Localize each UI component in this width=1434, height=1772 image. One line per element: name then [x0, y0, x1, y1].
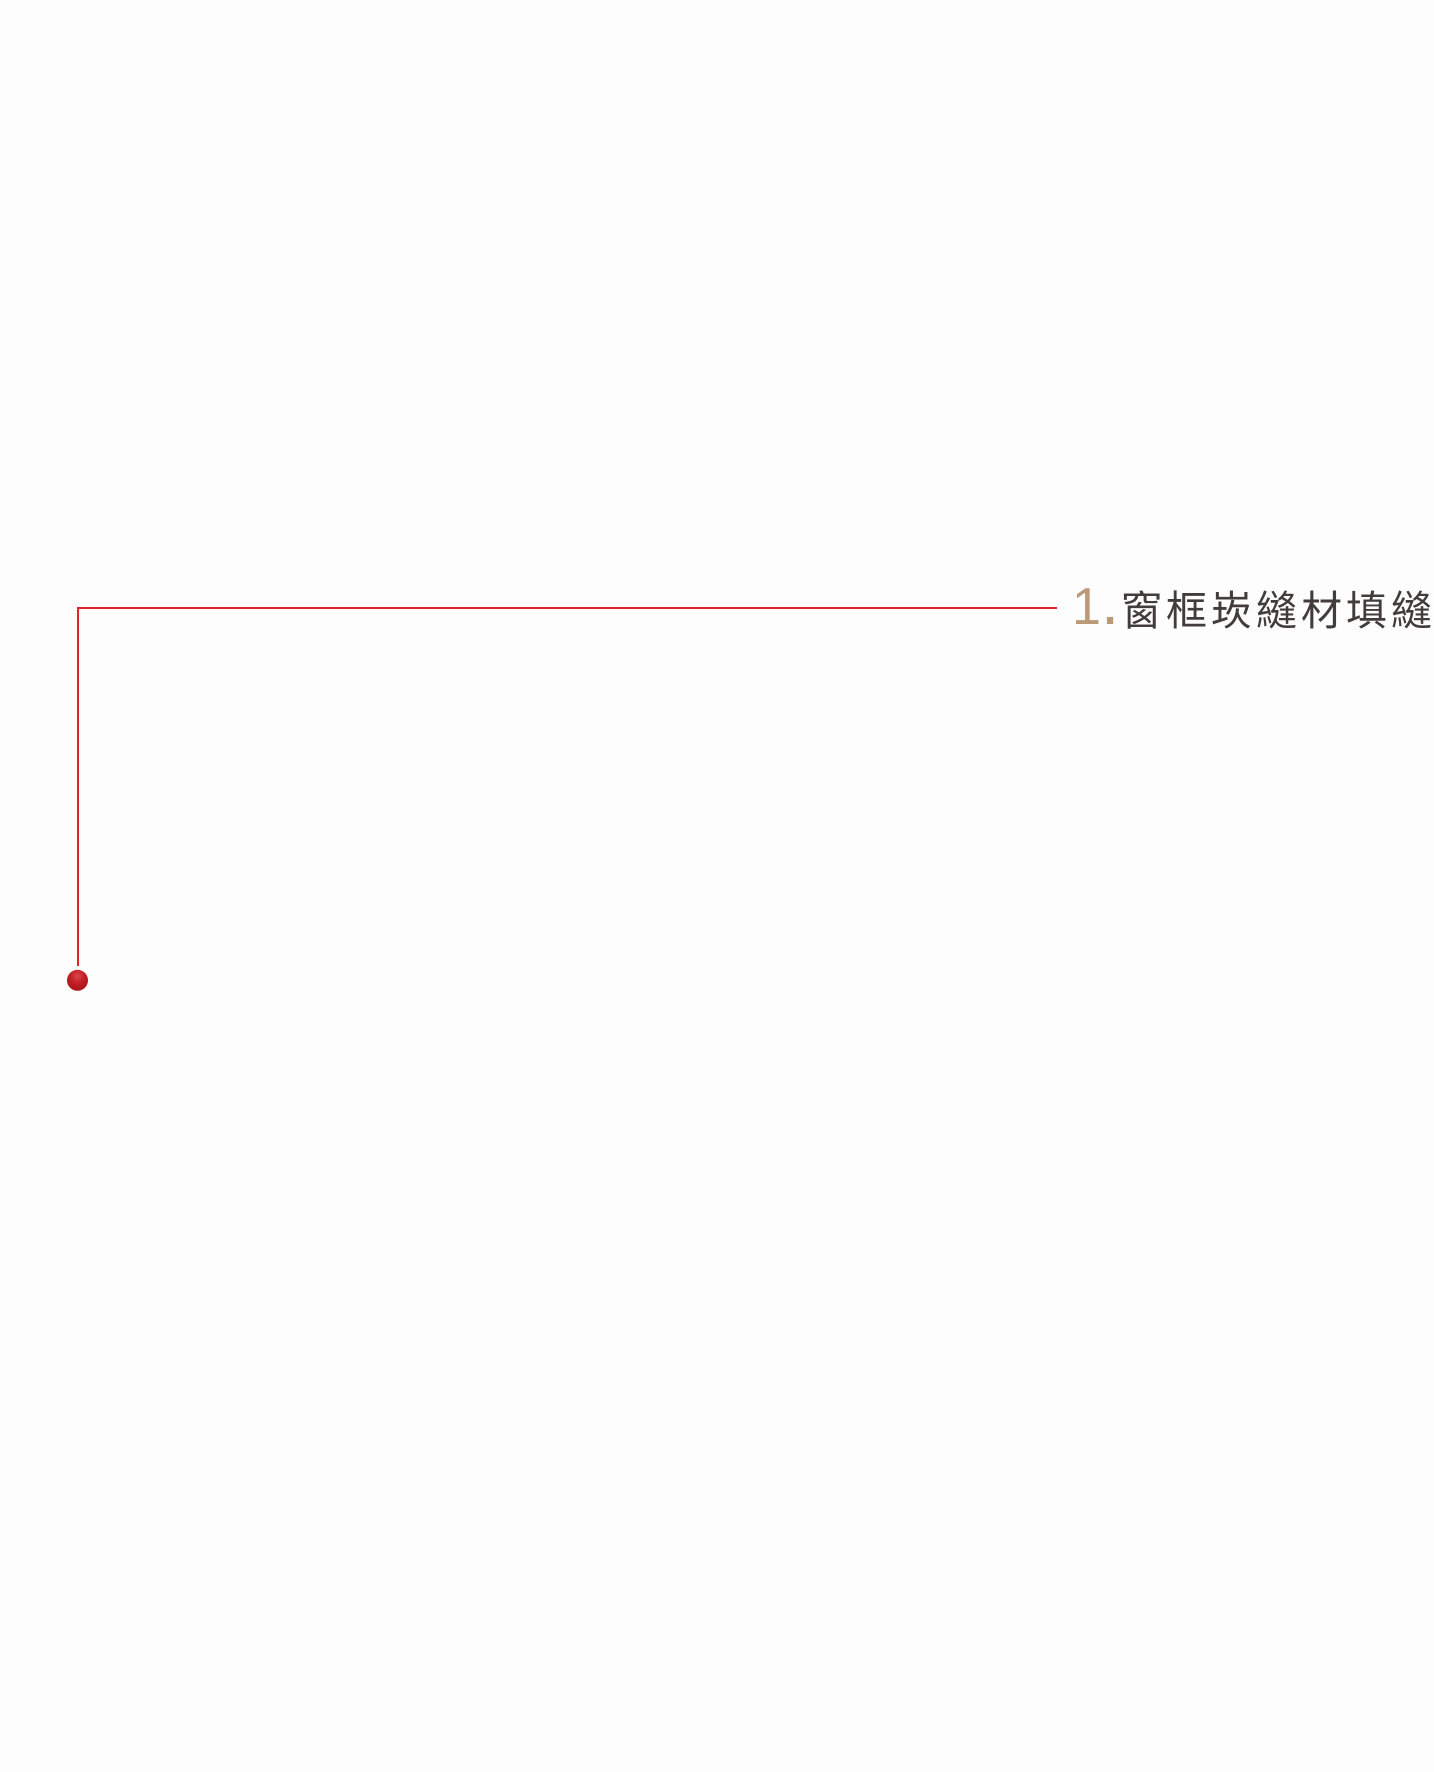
step label: 窗框崁縫材填縫 — [1121, 588, 1434, 634]
leader line — [78, 608, 1057, 966]
step number: 1. — [1072, 564, 1119, 638]
red dot marker — [67, 970, 88, 991]
